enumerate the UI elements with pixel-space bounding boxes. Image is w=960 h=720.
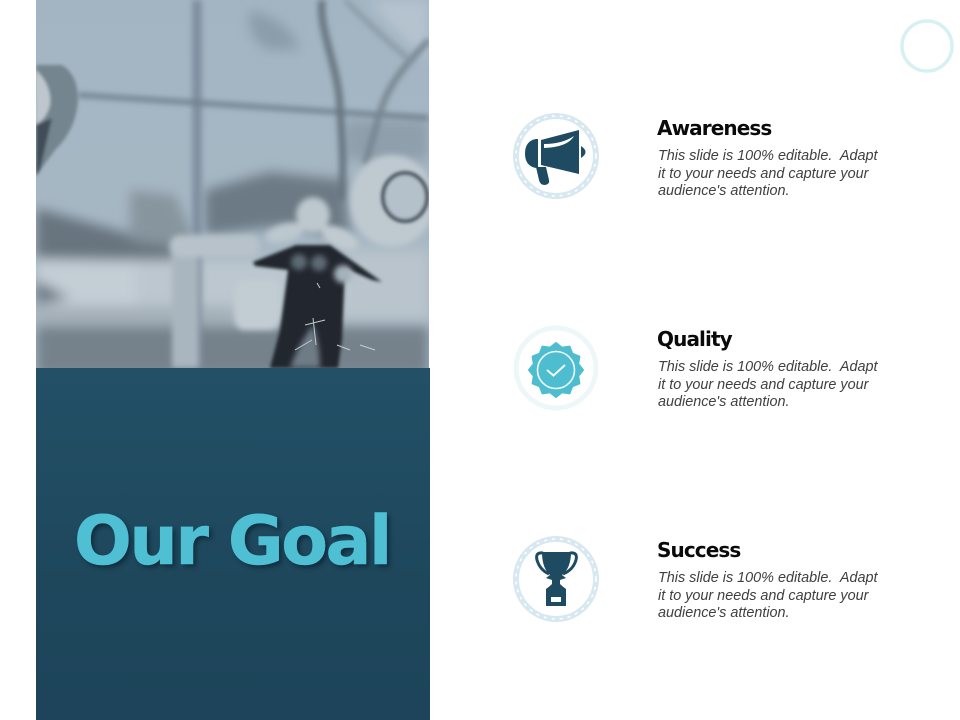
photo: blurred figure behind a fence <box>36 0 429 368</box>
icon: trophy <box>513 536 599 622</box>
item: awareness: Awareness <box>657 116 771 140</box>
item: success: This slide is 100% editable. Adapt <box>658 570 877 586</box>
item: success <box>657 538 878 621</box>
item: success: it to your needs and capture your <box>658 588 868 604</box>
item: quality: Quality <box>657 327 732 351</box>
icon: quality badge <box>514 326 598 410</box>
item: success: audience's attention. <box>658 605 790 621</box>
item: quality: it to your needs and capture your <box>658 376 868 392</box>
item: awareness: This slide is 100% editable. Adapt <box>658 148 877 164</box>
item: awareness <box>657 116 878 199</box>
item: awareness: it to your needs and capture your <box>658 166 868 182</box>
panel: our goal <box>36 368 430 720</box>
item: quality <box>657 327 878 410</box>
item: quality: This slide is 100% editable. Adapt <box>658 359 877 375</box>
decorative ring: top right <box>900 19 954 73</box>
title: Our Goal <box>74 502 390 581</box>
item: awareness: audience's attention. <box>658 183 790 199</box>
photo detail: ring target <box>350 155 434 247</box>
photo detail: blurred object at left edge <box>36 65 78 176</box>
icon: megaphone <box>513 113 599 199</box>
photo detail: figure <box>253 197 382 368</box>
item: success: Success <box>657 538 740 562</box>
item: quality: audience's attention. <box>658 394 790 410</box>
